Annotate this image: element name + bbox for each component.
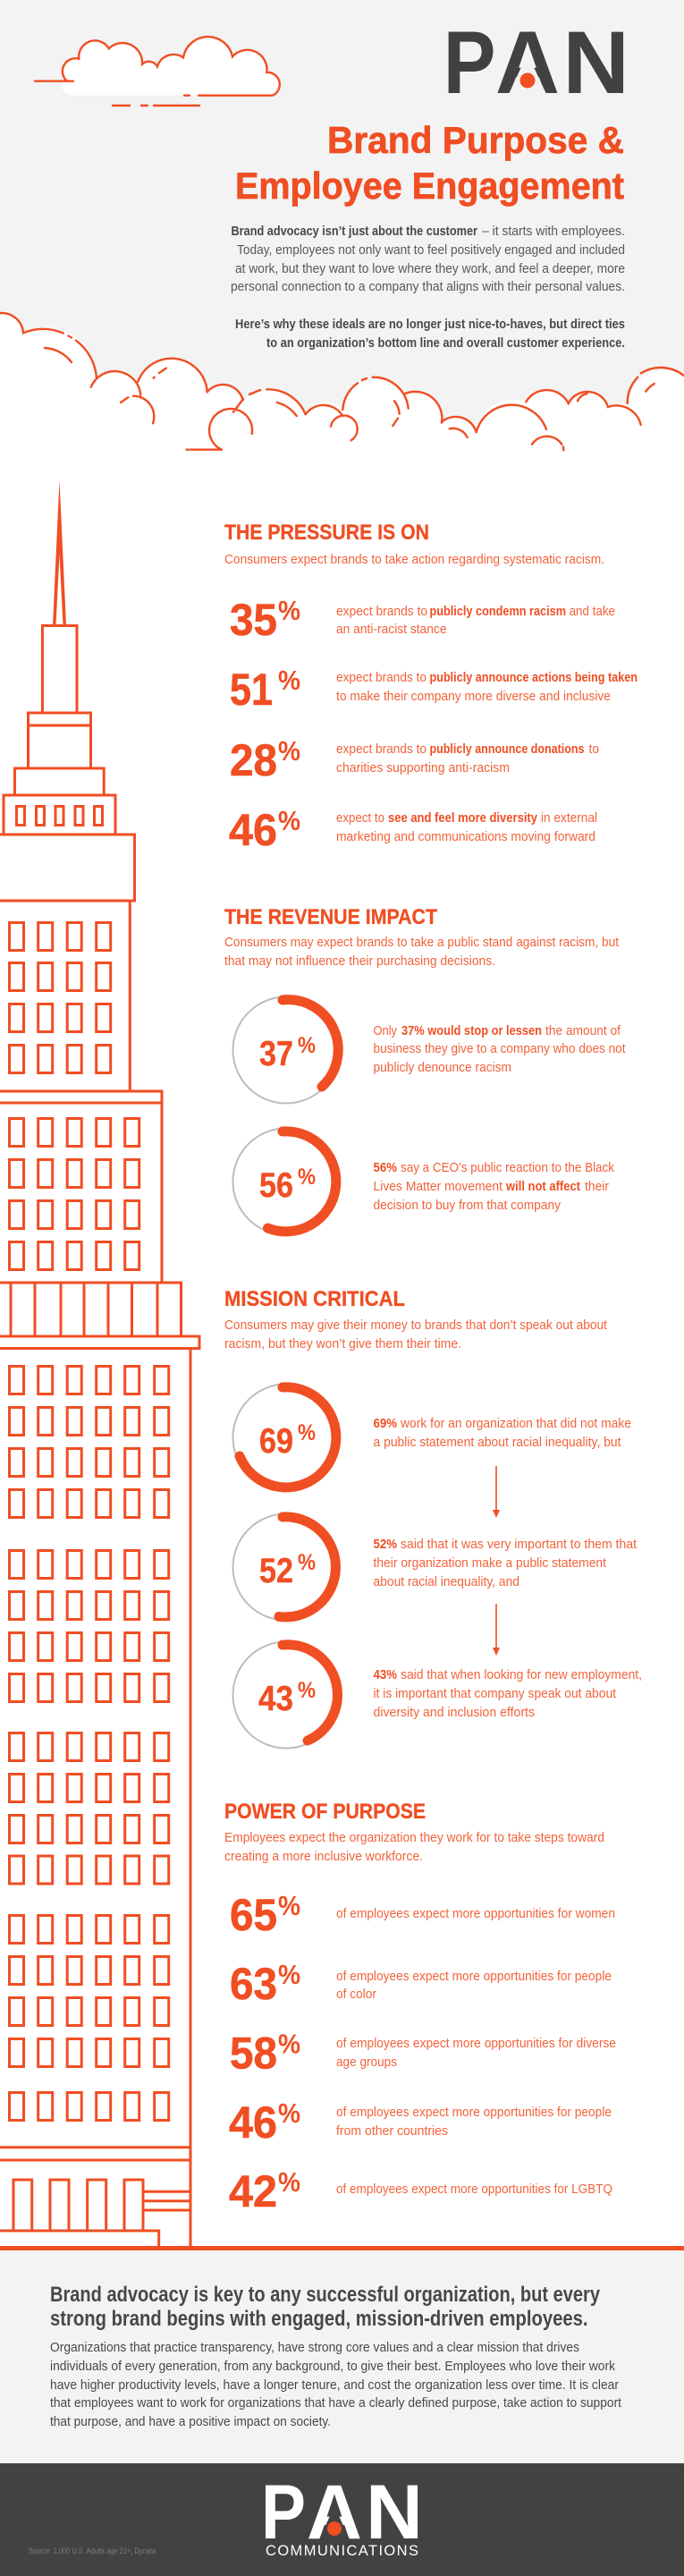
donut 56%: % [298, 1165, 316, 1190]
text: 56%: say a CEO’s public reaction to the Black [401, 1160, 614, 1175]
building illustration [0, 480, 199, 2248]
intro text block: Today, employees not only want to feel positively engaged and included [237, 242, 625, 258]
stat 28%: publicly announce donations [429, 741, 585, 757]
text: 52%: said that it was very important to them that [401, 1537, 638, 1552]
donut 69%: % [298, 1420, 316, 1445]
stat 35%: and take [570, 604, 615, 619]
intro lines [224, 1318, 608, 1352]
logo: PAN: A [495, 13, 560, 112]
arrow [493, 1604, 500, 1656]
text: 56%: Lives Matter movement [374, 1179, 503, 1194]
heading: THE PRESSURE IS ON [224, 521, 429, 545]
intro lines: creating a more inclusive workforce. [224, 1849, 423, 1864]
donut 37%: 37 [259, 1035, 293, 1073]
stat 51%: % [278, 665, 300, 696]
logo: PAN Communications: COMMUNICATIONS [266, 2543, 418, 2559]
stat 46%: % [278, 2097, 300, 2129]
text: 37%: Only [374, 1023, 397, 1038]
stat 65%: 65 [230, 1890, 277, 1940]
donut 43% [232, 1642, 340, 1748]
stat 51% [230, 665, 638, 715]
stat 63%: of color [336, 1987, 376, 2002]
intro line: Consumers expect brands to take action regarding systematic racism. [224, 552, 604, 567]
donut 69% [232, 1385, 340, 1490]
stat 46%: 46 [229, 2097, 277, 2148]
logo: PAN Communications: P [261, 2470, 306, 2555]
logo: PAN Communications: A [307, 2470, 362, 2555]
tower outline [0, 626, 199, 2248]
heading: THE REVENUE IMPACT [224, 905, 437, 929]
stat 63%: % [278, 1959, 300, 1990]
intro lines: that may not influence their purchasing decisions. [224, 953, 495, 969]
donut 52% [232, 1513, 340, 1621]
stat 46% [229, 2097, 612, 2148]
stat 28%: 28 [230, 735, 277, 785]
stat 58%: 58 [230, 2029, 277, 2079]
intro lines: racism, but they won’t give them their time. [224, 1336, 461, 1352]
donut 56% [232, 1129, 340, 1234]
stat 35%: an anti-racist stance [336, 622, 447, 637]
text: 37% [374, 1023, 626, 1075]
donut 52%: 52 [259, 1552, 293, 1590]
stat 35%: publicly condemn racism [429, 604, 566, 619]
text: 56%: 56% [374, 1160, 397, 1175]
logo: PAN: N [562, 13, 629, 112]
title: Brand Purpose & [327, 119, 624, 161]
text: 52%: about racial inequality, and [374, 1574, 519, 1589]
body: that employees want to work for organizations that have a clearly defined purpose, take action to support [50, 2395, 622, 2411]
body: individuals of every generation, from any background, to give their best. Employees who love their work [50, 2359, 615, 2374]
text: 43% [374, 1667, 642, 1720]
stat 28%: expect brands to [336, 741, 426, 757]
icon: small cloud top left [35, 37, 280, 106]
stat 46% [229, 805, 597, 855]
stat 35%: expect brands to [336, 604, 427, 619]
text: 69%: a public statement about racial inequality, but [374, 1435, 621, 1450]
stat 65% [230, 1890, 615, 1940]
white cloud bank [0, 313, 684, 483]
title: Employee Engagement [235, 165, 624, 207]
intro text block: Here’s why these ideals are no longer just nice-to-haves, but direct ties [235, 317, 625, 332]
stat 28%: % [278, 735, 300, 767]
text: 37%: the amount of [545, 1023, 621, 1038]
stat 51%: 51 [230, 665, 273, 715]
stat 65%: % [278, 1890, 300, 1921]
text: 56%: decision to buy from that company [374, 1198, 561, 1213]
spire [53, 480, 66, 625]
stat 28%: to [588, 741, 599, 757]
intro lines [224, 1830, 604, 1864]
source note: Source: 1,000 U.S. Adults age 21+, Dynata [29, 2546, 156, 2555]
intro text block [231, 224, 625, 351]
stat 46%: 46 [229, 805, 277, 855]
text: 52% [374, 1537, 638, 1589]
logo: PAN Communications: N [366, 2470, 423, 2555]
stat 35%: % [278, 595, 300, 626]
stat 42%: of employees expect more opportunities for LGBTQ [336, 2182, 612, 2197]
stat 58%: % [278, 2029, 300, 2059]
stat 46%: % [278, 805, 300, 836]
stat 35%: 35 [230, 595, 277, 645]
text: 43%: it is important that company speak out about [374, 1686, 617, 1701]
donut 69%: 69 [259, 1422, 293, 1461]
intro text block: Brand advocacy isn’t just about the customer [231, 224, 477, 239]
text: 56% [374, 1160, 614, 1213]
body: Organizations that practice transparency, have strong core values and a clear mission that drives [50, 2340, 579, 2355]
text: 52%: their organization make a public statement [374, 1555, 607, 1571]
stat 35% [230, 595, 615, 645]
heading: strong brand begins with engaged, mission-driven employees. [50, 2307, 588, 2331]
donut 37% [232, 996, 340, 1104]
donut 37%: % [298, 1033, 316, 1058]
stat 42%: % [278, 2166, 300, 2198]
panel: power of purpose [224, 1800, 616, 2216]
stat 58%: age groups [336, 2055, 397, 2070]
heading: POWER OF PURPOSE [224, 1800, 426, 1824]
panel: mission critical [224, 1287, 642, 1748]
stat 46%: in external [541, 810, 597, 826]
panel: conclusion background [0, 2248, 684, 2464]
intro lines: Consumers may give their money to brands that don’t speak out about [224, 1318, 608, 1333]
body: that purpose, and have a positive impact on society. [50, 2414, 331, 2429]
stat 51%: publicly announce actions being taken [429, 670, 638, 685]
stat 46%: of employees expect more opportunities for people [336, 2105, 612, 2120]
text: 56%: will not affect [505, 1179, 580, 1194]
text: 43%: said that when looking for new employment, [401, 1667, 642, 1682]
intro lines: Consumers may expect brands to take a public stand against racism, but [224, 935, 620, 950]
panel: the revenue impact [224, 905, 626, 1234]
stat 63%: of employees expect more opportunities for people [336, 1969, 612, 1984]
donut 43%: 43 [258, 1680, 293, 1718]
stat 46%: expect to [336, 810, 384, 826]
stat 46%: see and feel more diversity [388, 810, 538, 826]
panel: the pressure is on [224, 521, 638, 855]
title [235, 119, 624, 207]
donut 52%: % [298, 1550, 316, 1575]
body [50, 2340, 622, 2429]
ground line [0, 2246, 684, 2250]
stat 51%: to make their company more diverse and inclusive [336, 689, 611, 704]
stat 46%: from other countries [336, 2123, 448, 2139]
donut 43%: % [298, 1678, 316, 1703]
header background panel [0, 0, 684, 483]
body: have higher productivity levels, have a longer tenure, and cost the organization less over time. It is clear [50, 2377, 619, 2393]
intro text block: personal connection to a company that aligns with their personal values. [231, 279, 625, 294]
windows [9, 923, 111, 950]
logo: PAN: P [443, 13, 495, 112]
intro text block: to an organization’s bottom line and overall customer experience. [266, 335, 625, 351]
panel: conclusion text [50, 2283, 622, 2429]
text: 37%: 37% would stop or lessen [401, 1023, 542, 1038]
intro text block: – it starts with employees. [482, 224, 625, 239]
text: 37%: business they give to a company who does not [374, 1041, 626, 1056]
stat 42% [229, 2166, 612, 2216]
heading [50, 2283, 601, 2331]
text: 43%: diversity and inclusion efforts [374, 1705, 535, 1720]
intro text block: at work, but they want to love where they work, and feel a deeper, more [235, 261, 625, 276]
logo: PAN [443, 13, 629, 112]
intro lines: Employees expect the organization they work for to take steps toward [224, 1830, 604, 1845]
text: 56%: their [585, 1179, 609, 1194]
stat 58% [230, 2029, 616, 2079]
stat 42%: 42 [229, 2166, 277, 2216]
text: 43%: 43% [374, 1667, 397, 1682]
stat 46%: marketing and communications moving forward [336, 829, 595, 844]
stat 65%: of employees expect more opportunities for women [336, 1906, 615, 1921]
text: 52%: 52% [374, 1537, 397, 1552]
text: 69%: 69% [374, 1416, 397, 1431]
intro lines [224, 935, 620, 969]
donut 56%: 56 [259, 1166, 293, 1205]
stat 58%: of employees expect more opportunities for diverse [336, 2036, 616, 2051]
text: 69% [374, 1416, 631, 1450]
tower crown windows [16, 807, 102, 825]
stat 28% [230, 735, 599, 785]
stat 51%: expect brands to [336, 670, 426, 685]
stat 28%: charities supporting anti-racism [336, 760, 510, 775]
stat 63%: 63 [230, 1959, 277, 2009]
logo: PAN Communications [261, 2470, 423, 2559]
heading: MISSION CRITICAL [224, 1287, 405, 1311]
arrow [493, 1466, 500, 1518]
text: 69%: work for an organization that did not make [400, 1416, 631, 1431]
footer panel [0, 2463, 684, 2576]
text: 37%: publicly denounce racism [374, 1060, 511, 1075]
stat 63% [230, 1959, 612, 2009]
